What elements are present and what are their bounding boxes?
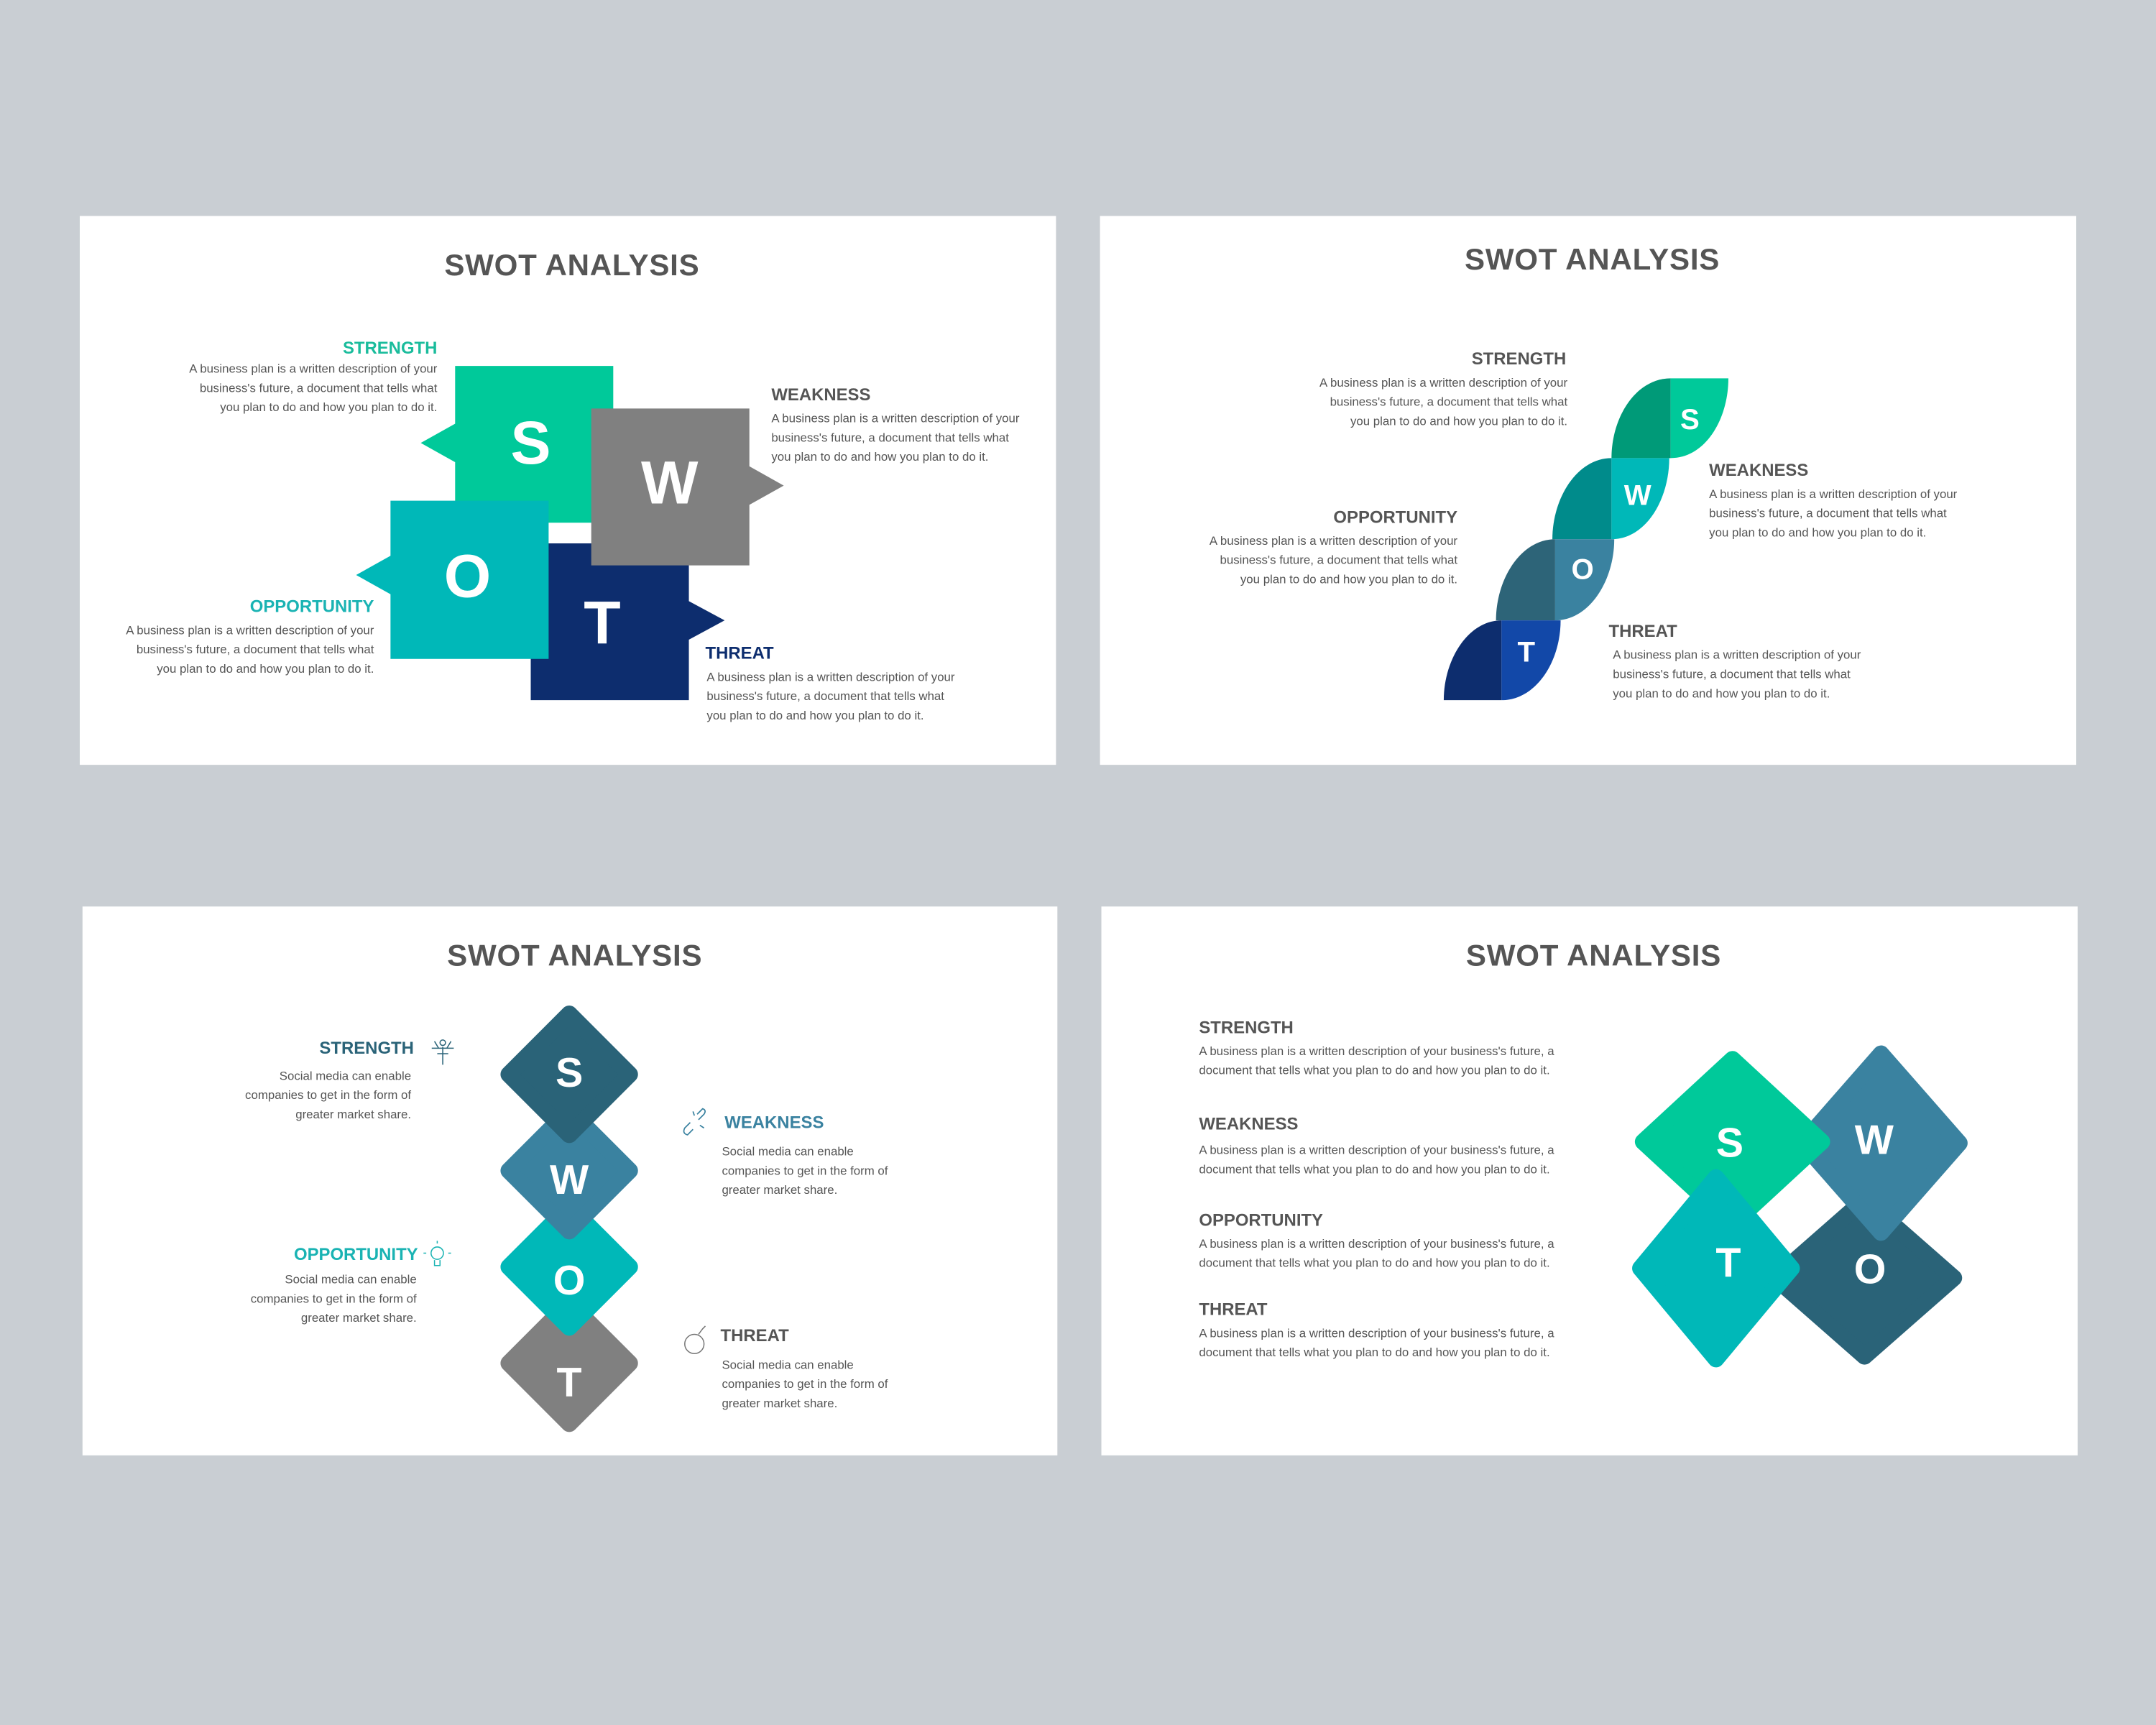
text: strength: greater market share. bbox=[295, 1108, 411, 1121]
title: SWOT ANALYSIS bbox=[444, 248, 699, 282]
text: threat: you plan to do and how you plan to do it. bbox=[706, 709, 924, 722]
text: weakness: greater market share. bbox=[722, 1183, 837, 1197]
icon: bomb bbox=[685, 1326, 706, 1353]
text: opportunity: OPPORTUNITY bbox=[1199, 1210, 1323, 1230]
leaf: S: S bbox=[1680, 403, 1700, 436]
text: strength: A business plan is a written description of your bbox=[1319, 376, 1568, 390]
icon: light bulb bbox=[423, 1241, 451, 1266]
leaf: O: O bbox=[1572, 553, 1594, 586]
shape: O block bbox=[356, 501, 548, 659]
text: threat bbox=[1199, 1300, 1554, 1359]
diamond: T bbox=[1641, 1177, 1792, 1359]
text: threat: THREAT bbox=[1609, 622, 1677, 641]
text: threat: companies to get in the form of bbox=[722, 1377, 888, 1391]
text: threat: Social media can enable bbox=[722, 1358, 854, 1371]
text: threat: document that tells what you plan to do and how you plan to do it. bbox=[1199, 1346, 1550, 1359]
text: opportunity: OPPORTUNITY bbox=[250, 597, 374, 617]
text: strength: A business plan is a written description of your bbox=[189, 362, 438, 376]
text: threat: A business plan is a written description of your bbox=[1613, 648, 1861, 662]
text: strength: document that tells what you plan to do and how you plan to do it. bbox=[1199, 1064, 1550, 1077]
text: strength bbox=[245, 1039, 414, 1121]
text: opportunity: Social media can enable bbox=[285, 1273, 417, 1287]
text: weakness bbox=[1199, 1114, 1554, 1177]
text: strength bbox=[189, 339, 438, 414]
text: opportunity: business's future, a document that tells what bbox=[1220, 553, 1457, 567]
text: strength: you plan to do and how you plan to do it. bbox=[1350, 414, 1567, 428]
diamond: O bbox=[1775, 1200, 1954, 1356]
text: threat: THREAT bbox=[706, 644, 774, 663]
text: opportunity: greater market share. bbox=[301, 1311, 417, 1325]
text: weakness: business's future, a document that tells what bbox=[1709, 507, 1947, 520]
text: weakness: you plan to do and how you plan to do it. bbox=[771, 450, 988, 464]
diamond: O: O bbox=[553, 1258, 585, 1304]
diamond: O bbox=[509, 1206, 630, 1328]
text: strength bbox=[1319, 349, 1568, 428]
text: weakness: Social media can enable bbox=[722, 1145, 854, 1159]
text: weakness: WEAKNESS bbox=[1199, 1114, 1299, 1133]
leaf: S bbox=[1611, 378, 1728, 458]
leaf: W bbox=[1552, 458, 1669, 539]
text: weakness: business's future, a document that tells what bbox=[771, 431, 1009, 444]
text: opportunity: A business plan is a written description of your bbox=[1210, 534, 1457, 548]
leaf: T bbox=[1444, 620, 1561, 700]
text: weakness: A business plan is a written description of your bbox=[1709, 487, 1958, 501]
text: threat: A business plan is a written description of your business's future, a bbox=[1199, 1326, 1554, 1340]
shape: W block: W bbox=[641, 448, 699, 516]
panel: leaf SWOT bbox=[1100, 216, 2076, 765]
text: opportunity: companies to get in the form of bbox=[251, 1292, 417, 1305]
text: strength: STRENGTH bbox=[1472, 349, 1566, 369]
diamond: T bbox=[509, 1302, 630, 1424]
leaf: W: W bbox=[1624, 479, 1651, 511]
text: strength bbox=[1199, 1018, 1554, 1077]
text: threat bbox=[706, 644, 955, 722]
text: strength: STRENGTH bbox=[319, 1039, 414, 1058]
text: weakness bbox=[771, 385, 1020, 464]
text: strength: business's future, a document that tells what bbox=[200, 381, 438, 395]
text: opportunity: business's future, a document that tells what bbox=[137, 643, 374, 656]
text: threat: business's future, a document that tells what bbox=[706, 689, 944, 703]
text: opportunity: you plan to do and how you plan to do it. bbox=[157, 662, 374, 676]
diamond: W: W bbox=[1855, 1118, 1894, 1164]
text: opportunity: A business plan is a written description of your business's future, a bbox=[1199, 1237, 1554, 1251]
text: strength: companies to get in the form of bbox=[245, 1088, 411, 1102]
text: threat: A business plan is a written description of your bbox=[706, 670, 955, 684]
text: weakness: document that tells what you plan to do and how you plan to do it. bbox=[1199, 1163, 1550, 1177]
shape: W block bbox=[591, 408, 784, 566]
text: opportunity bbox=[126, 597, 374, 676]
icon: strength figure bbox=[432, 1040, 453, 1064]
shape: S block bbox=[420, 366, 613, 523]
diamond: S bbox=[1643, 1059, 1822, 1224]
text: opportunity bbox=[1199, 1210, 1554, 1270]
diamond: W bbox=[509, 1110, 630, 1231]
text: threat: THREAT bbox=[1199, 1300, 1268, 1320]
text: strength: A business plan is a written description of your business's future, a bbox=[1199, 1044, 1554, 1058]
text: strength: you plan to do and how you plan to do it. bbox=[220, 400, 437, 414]
shape: T block bbox=[531, 543, 724, 700]
title: SWOT ANALYSIS bbox=[1465, 242, 1720, 276]
text: weakness: you plan to do and how you plan to do it. bbox=[1709, 525, 1926, 539]
text: opportunity: you plan to do and how you plan to do it. bbox=[1240, 572, 1457, 586]
text: opportunity: OPPORTUNITY bbox=[294, 1245, 418, 1264]
diamond: S: S bbox=[1716, 1121, 1743, 1167]
text: threat: greater market share. bbox=[722, 1397, 837, 1410]
text: weakness: WEAKNESS bbox=[1709, 461, 1808, 480]
text: weakness: companies to get in the form of bbox=[722, 1164, 888, 1177]
text: threat bbox=[721, 1326, 888, 1410]
panel: square arrows SWOT bbox=[80, 216, 1056, 765]
text: weakness: WEAKNESS bbox=[771, 385, 871, 405]
shape: S block: S bbox=[510, 409, 551, 477]
shape: T block: T bbox=[584, 589, 621, 657]
text: opportunity bbox=[1210, 507, 1457, 586]
panel: four diamonds SWOT bbox=[1102, 906, 2078, 1455]
text: weakness bbox=[1709, 461, 1958, 539]
text: threat: THREAT bbox=[721, 1326, 789, 1346]
text: strength: STRENGTH bbox=[1199, 1018, 1294, 1037]
text: weakness: A business plan is a written description of your bbox=[771, 412, 1020, 426]
diamond: O: O bbox=[1854, 1247, 1886, 1293]
text: strength: Social media can enable bbox=[280, 1069, 411, 1082]
shape: O block: O bbox=[444, 543, 491, 610]
text: weakness bbox=[722, 1113, 888, 1197]
title: SWOT ANALYSIS bbox=[1466, 939, 1721, 972]
text: opportunity: A business plan is a written description of your bbox=[126, 623, 374, 637]
text: threat: business's future, a document that tells what bbox=[1613, 668, 1851, 681]
text: threat bbox=[1609, 622, 1861, 700]
text: opportunity: document that tells what you plan to do and how you plan to do it. bbox=[1199, 1256, 1550, 1270]
text: strength: business's future, a document that tells what bbox=[1330, 395, 1567, 409]
diamond: W: W bbox=[550, 1157, 589, 1203]
text: weakness: WEAKNESS bbox=[724, 1113, 824, 1132]
panel: vertical diamonds SWOT bbox=[83, 906, 1057, 1455]
text: opportunity bbox=[251, 1245, 418, 1325]
diamond: W bbox=[1802, 1054, 1959, 1233]
icon: broken chain bbox=[684, 1109, 705, 1135]
diamond: S: S bbox=[556, 1050, 583, 1096]
diamond: S bbox=[509, 1014, 630, 1135]
text: opportunity: OPPORTUNITY bbox=[1333, 507, 1457, 527]
leaf: T: T bbox=[1517, 636, 1535, 668]
text: threat: you plan to do and how you plan to do it. bbox=[1613, 686, 1830, 700]
title: SWOT ANALYSIS bbox=[447, 939, 702, 972]
diamond: T: T bbox=[1715, 1240, 1741, 1286]
text: weakness: A business plan is a written description of your business's future, a bbox=[1199, 1144, 1554, 1157]
diamond: T: T bbox=[557, 1360, 582, 1406]
text: strength: STRENGTH bbox=[343, 339, 437, 358]
leaf: O bbox=[1496, 539, 1614, 620]
